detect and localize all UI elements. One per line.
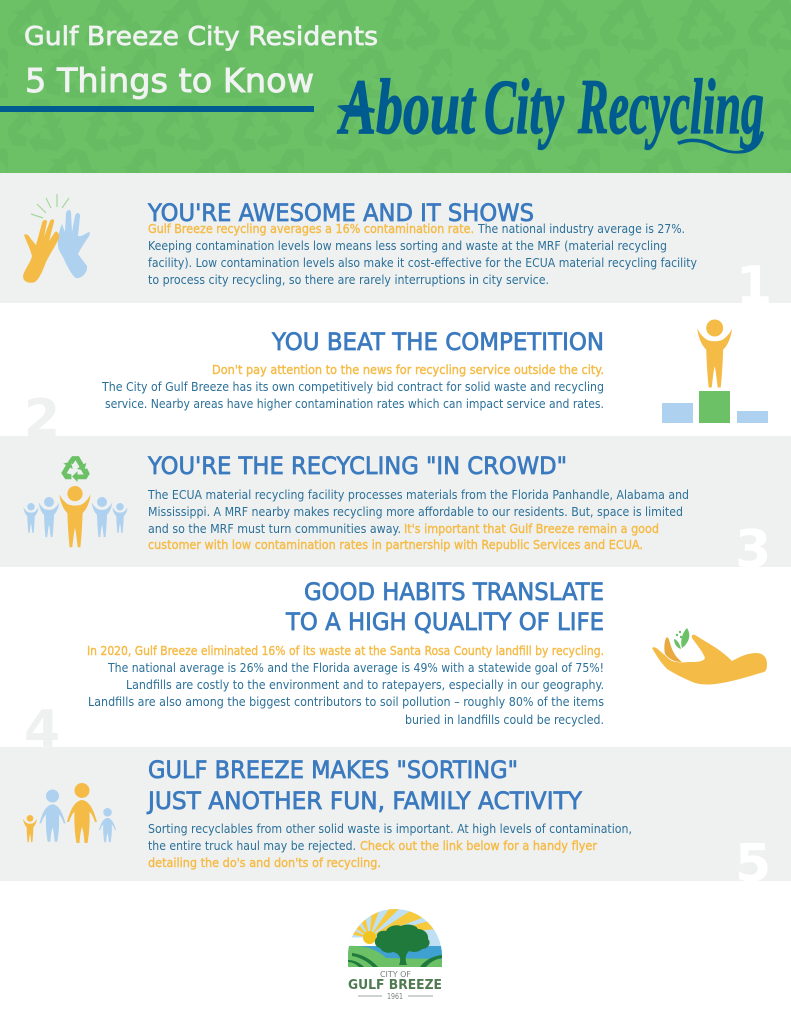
- header banner: [0, 0, 791, 173]
- heading 4: GOOD HABITS TRANSLATE: [304, 578, 604, 606]
- logo wordmark: 1961: [387, 992, 403, 1001]
- panel: section 3: [0, 436, 791, 580]
- heading 5: JUST ANOTHER FUN, FAMILY ACTIVITY: [146, 787, 582, 815]
- script title: About: [337, 63, 477, 150]
- body text 3: Mississippi. A MRF nearby makes recycling more affordable to our residents. But, space is limited: [148, 504, 683, 519]
- body text 3: and so the MRF must turn communities away.: [148, 521, 401, 536]
- body text 4: Landfills are also among the biggest contributors to soil pollution – roughly 80% of the items: [88, 694, 604, 709]
- body text 3: It's important that Gulf Breeze remain a good: [404, 521, 659, 536]
- heading 4: [285, 578, 604, 636]
- body text 4: [87, 643, 604, 727]
- icon: high five: [23, 194, 90, 283]
- body text 5: the entire truck haul may be rejected.: [148, 838, 356, 853]
- body text 1: Keeping contamination levels low means less sorting and waste at the MRF (material recycling: [148, 238, 667, 253]
- body text 5: Check out the link below for a handy flyer: [360, 838, 598, 853]
- body text 4: In 2020, Gulf Breeze eliminated 16% of its waste at the Santa Rosa County landfill by recycling.: [87, 643, 604, 658]
- body text 2: service. Nearby areas have higher contamination rates which can impact service and rates.: [105, 396, 604, 411]
- body text 2: The City of Gulf Breeze has its own competitively bid contract for solid waste and recycling: [101, 379, 604, 394]
- body text 5: [148, 821, 632, 870]
- body text 1: facility). Low contamination levels also make it cost-effective for the ECUA material recycling facility: [148, 255, 697, 270]
- body text 5: Sorting recyclables from other solid waste is important. At high levels of contamination,: [148, 821, 632, 836]
- logo: City of Gulf Breeze: [348, 906, 442, 1001]
- script title: [337, 63, 764, 154]
- body text 1: [148, 221, 697, 287]
- script title: City: [484, 63, 564, 150]
- heading 2: YOU BEAT THE COMPETITION: [271, 328, 604, 356]
- header rule: [0, 106, 314, 112]
- body text 2: Don't pay attention to the news for recycling service outside the city.: [212, 362, 604, 377]
- body text 1: to process city recycling, so there are rarely interruptions in city service.: [148, 272, 549, 287]
- body text 4: Landfills are costly to the environment and to ratepayers, especially in our geography.: [126, 677, 604, 692]
- logo wordmark: CITY OF: [380, 970, 411, 979]
- body text 5: detailing the do's and don'ts of recycling.: [148, 855, 381, 870]
- panel: section 4: [0, 567, 791, 760]
- number 1: 1: [736, 256, 772, 316]
- icon: hand holding seedling: [652, 628, 767, 684]
- body text 3: customer with low contamination rates in partnership with Republic Services and ECUA.: [148, 537, 643, 552]
- number 3: 3: [735, 520, 771, 580]
- body text 1: Gulf Breeze recycling averages a 16% contamination rate.: [148, 221, 474, 236]
- icon: podium: [662, 320, 768, 423]
- number 5: 5: [735, 834, 771, 894]
- logo wordmark: [348, 970, 442, 1001]
- body text 4: buried in landfills could be recycled.: [405, 712, 604, 727]
- heading 1: YOU'RE AWESOME AND IT SHOWS: [147, 199, 534, 227]
- logo wordmark: GULF BREEZE: [348, 978, 442, 993]
- heading 4: TO A HIGH QUALITY OF LIFE: [285, 608, 604, 636]
- body text 2: [101, 362, 604, 411]
- heading 3: YOU'RE THE RECYCLING "IN CROWD": [147, 452, 567, 480]
- body text 1: The national industry average is 27%.: [477, 221, 685, 236]
- body text 4: The national average is 26% and the Florida average is 49% with a statewide goal of 75%!: [107, 660, 604, 675]
- icon: family: [23, 783, 116, 843]
- panel: section 5: [0, 747, 791, 894]
- panel: section 1: [0, 173, 791, 316]
- icon: recycling crowd: [23, 456, 128, 547]
- body text 3: The ECUA material recycling facility processes materials from the Florida Panhandle, Alabama and: [147, 487, 689, 502]
- number 2: 2: [24, 389, 60, 449]
- number 4: 4: [24, 700, 60, 760]
- body text 3: [147, 487, 689, 552]
- panel: section 2: [0, 303, 791, 449]
- heading 5: [146, 756, 582, 815]
- header title: 5 Things to Know: [25, 61, 314, 100]
- heading 5: GULF BREEZE MAKES "SORTING": [148, 756, 518, 784]
- header kicker: Gulf Breeze City Residents: [24, 22, 378, 52]
